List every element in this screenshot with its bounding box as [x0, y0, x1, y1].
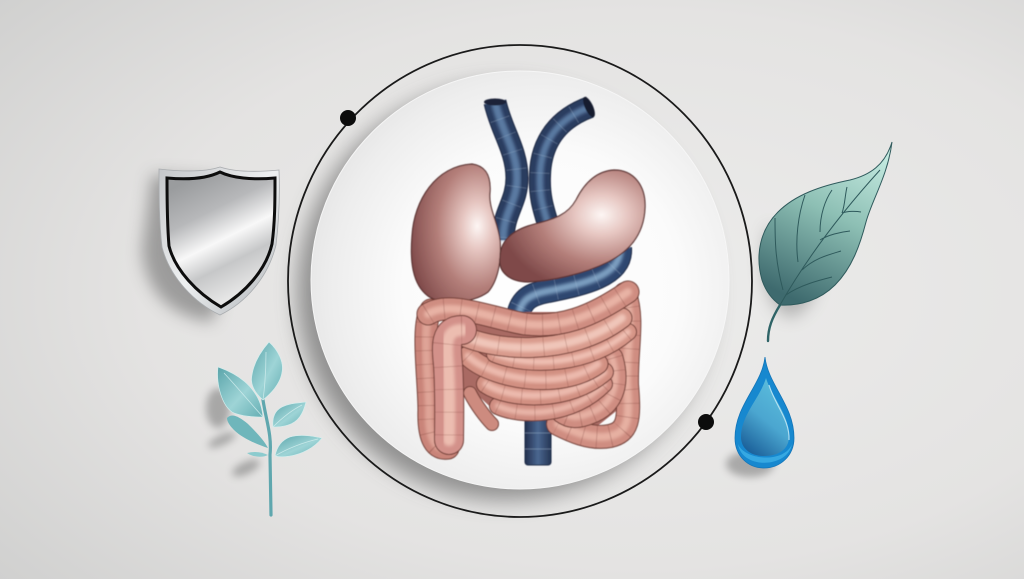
colon outer right	[558, 294, 629, 437]
leaf stem	[768, 305, 780, 341]
loop G	[486, 372, 604, 395]
ring dot upper left	[340, 110, 356, 126]
loop E	[495, 332, 628, 362]
tube: lower vessel under stomach	[517, 248, 620, 324]
loop C top band	[428, 292, 628, 325]
organ: left kidney	[411, 164, 500, 302]
colon outer left	[426, 310, 448, 448]
outer ring	[288, 45, 752, 517]
panel: central disc with ring	[288, 45, 752, 517]
appendix	[470, 393, 492, 424]
loop D	[455, 318, 622, 348]
colon inner left	[447, 330, 462, 440]
icon: large leaf	[759, 142, 892, 341]
plant shadows	[206, 388, 262, 480]
white disc	[311, 71, 729, 489]
stem	[263, 400, 271, 515]
icon: shield	[142, 167, 279, 322]
tube: right upper vessel	[540, 95, 597, 224]
right inner loop	[562, 358, 615, 417]
ring dot lower right	[698, 414, 714, 430]
backing shape	[440, 295, 630, 432]
leaf midribs	[224, 352, 318, 456]
leaves	[251, 342, 282, 400]
icon: small plant	[206, 342, 322, 515]
icon: water drop	[726, 357, 794, 477]
organ: intestines	[426, 292, 630, 448]
leaf blade	[759, 142, 892, 305]
leaf veins	[775, 170, 880, 305]
organs illustration	[411, 95, 645, 465]
organ: stomach	[500, 170, 645, 282]
drop inner body	[741, 378, 789, 456]
tube: left upper vessel	[484, 98, 517, 240]
loop F	[468, 356, 598, 380]
tube: bottom vessel	[525, 405, 551, 465]
loop H	[498, 384, 604, 412]
drop bottom glow	[738, 444, 792, 463]
